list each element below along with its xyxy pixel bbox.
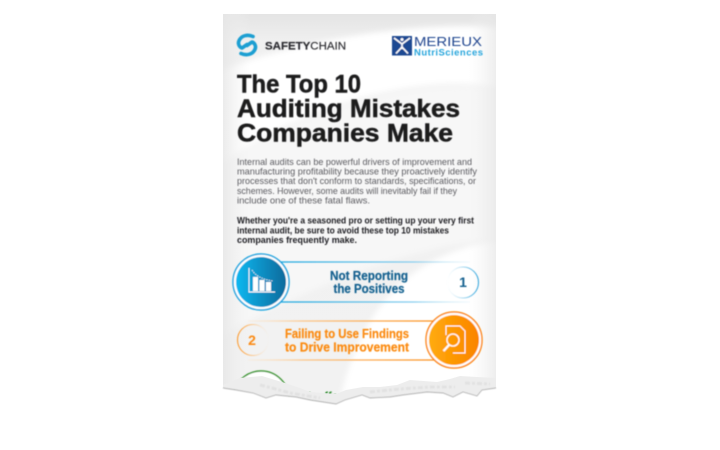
pill outline bbox=[248, 321, 440, 360]
number 2: 2 bbox=[248, 332, 256, 348]
title bbox=[237, 70, 460, 148]
icon: orange document magnifier circle bbox=[426, 312, 482, 368]
text block: introduction: manufacturing profitability because they proactively identify bbox=[237, 166, 477, 176]
text block: bold call to action: internal audit, be sure to avoid these top 10 mistakes bbox=[237, 226, 449, 236]
title: The Top 10 bbox=[237, 70, 361, 98]
text: mistake 2 title: to Drive Improvement bbox=[285, 340, 410, 354]
number 1: 1 bbox=[459, 274, 467, 290]
panel: mistake 3 (cut off): Ineffe bbox=[308, 390, 338, 404]
panel: infographic page bbox=[223, 14, 496, 394]
text: mistake 1 title: the Positives bbox=[334, 282, 405, 296]
text block: introduction: schemes. However, some audits will inevitably fail if they bbox=[237, 186, 457, 196]
text: mistake 2 title: Failing to Use Findings bbox=[285, 327, 409, 341]
panel: mistake 1 bbox=[233, 254, 478, 310]
pill outline bbox=[280, 262, 470, 302]
logo: Merieux NutriSciences bbox=[392, 34, 483, 58]
panel: mistake 3 (cut off) bbox=[233, 371, 445, 427]
text block: introduction: Internal audits can be powerful drivers of improvement and bbox=[237, 157, 472, 167]
text block: introduction: include one of these fatal flaws. bbox=[237, 196, 370, 206]
panel: mistake 2 bbox=[238, 312, 482, 368]
title: Companies Make bbox=[237, 120, 453, 148]
number badge bbox=[448, 267, 478, 298]
number badge bbox=[238, 324, 268, 356]
text block: introduction: processes that don't conform to standards, specifications, or bbox=[237, 176, 476, 186]
text block: introduction bbox=[237, 157, 477, 206]
text: mistake 1 title bbox=[330, 269, 408, 296]
text: MERIEUX: MERIEUX bbox=[414, 34, 482, 49]
torn paper edge bbox=[223, 376, 496, 450]
text block: bold call to action: companies frequently make. bbox=[237, 235, 357, 245]
icon: blue chart circle bbox=[233, 254, 289, 310]
text: SafetyChain wordmark: SAFETYCHAIN bbox=[265, 40, 346, 52]
text block: bold call to action bbox=[237, 216, 474, 245]
text: NutriSciences: NutriSciences bbox=[414, 48, 483, 58]
title: Auditing Mistakes bbox=[237, 95, 460, 123]
icon: SafetyChain mark bbox=[239, 35, 255, 55]
text block: bold call to action: Whether you're a seasoned pro or setting up your very first bbox=[237, 216, 474, 226]
text: mistake 2 title bbox=[285, 327, 410, 354]
icon: Merieux emblem bbox=[392, 36, 412, 56]
logo: SafetyChain bbox=[239, 35, 346, 55]
text: mistake 1 title: Not Reporting bbox=[330, 269, 408, 283]
